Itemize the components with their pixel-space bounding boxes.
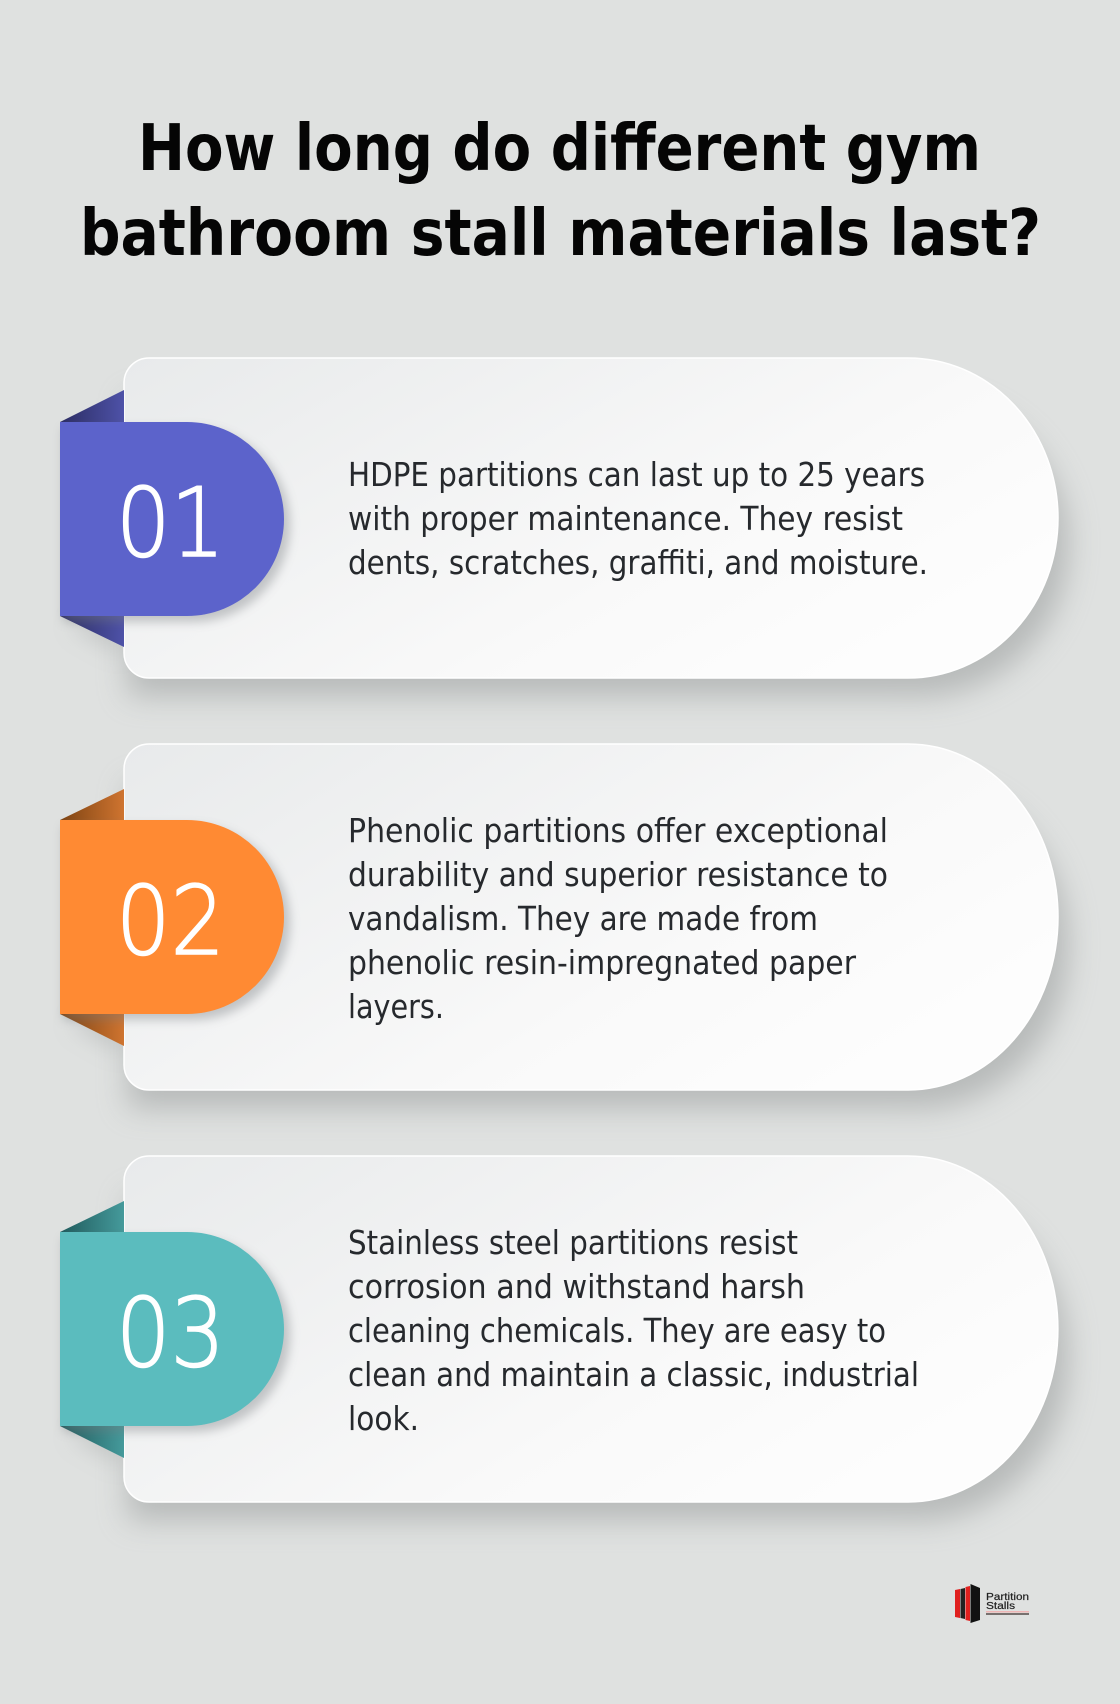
card 01 number tab: 01 (116, 469, 225, 579)
card 03 description: cleaning chemicals. They are easy to (348, 1312, 886, 1350)
card 02 description: phenolic resin-impregnated paper (348, 944, 857, 982)
card 01 description: HDPE partitions can last up to 25 years (348, 456, 925, 494)
logo: Partition Stalls: Partition (986, 1592, 1029, 1603)
card 03 description: look. (348, 1400, 419, 1438)
card 02 number tab: 02 (116, 867, 225, 977)
card 03 description: clean and maintain a classic, industrial (348, 1356, 919, 1394)
card 02 description: layers. (348, 988, 444, 1026)
card 02 description: vandalism. They are made from (348, 900, 818, 938)
panel: card 01 HDPE (60, 358, 1068, 697)
card 03 description: corrosion and withstand harsh (348, 1268, 805, 1306)
card 01 surface (124, 358, 1058, 678)
card 02 description: durability and superior resistance to (348, 856, 888, 894)
card 02 number tab (60, 820, 290, 1020)
title (80, 112, 1041, 271)
card 02 description (348, 812, 888, 1026)
title: How long do different gym (138, 112, 981, 186)
card 03 surface (124, 1156, 1058, 1502)
card 01 number tab (60, 422, 290, 622)
card 03 number tab: 03 (116, 1279, 225, 1389)
card 02 surface (124, 744, 1058, 1090)
card 03 description: Stainless steel partitions resist (348, 1224, 798, 1262)
card 03 description (348, 1224, 919, 1438)
card 01 description: dents, scratches, graffiti, and moisture. (348, 544, 928, 582)
card 01 description (348, 456, 928, 582)
card 03 ribbon fold (60, 1201, 124, 1458)
card 03 number tab (60, 1232, 290, 1432)
panel: card 02 Phenolic (60, 744, 1068, 1109)
panel: card 03 Stainless steel (60, 1156, 1068, 1521)
icon: partition bars (955, 1584, 980, 1623)
card 01 ribbon fold (60, 390, 124, 647)
logo: Partition Stalls: Stalls (986, 1601, 1015, 1612)
card 02 ribbon fold (60, 789, 124, 1046)
card 01 description: with proper maintenance. They resist (348, 500, 903, 538)
logo: Partition Stalls (955, 1584, 1029, 1623)
card 02 description: Phenolic partitions offer exceptional (348, 812, 888, 850)
